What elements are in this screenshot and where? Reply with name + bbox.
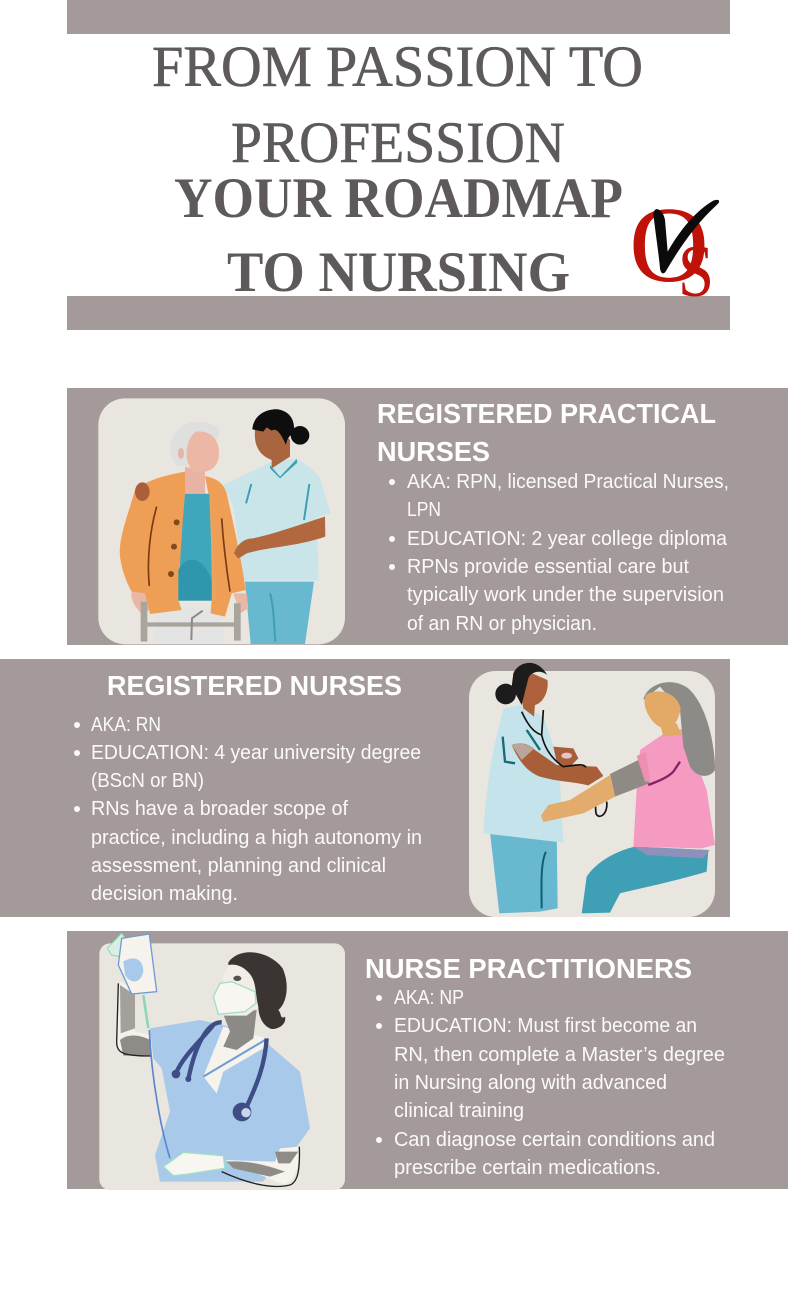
logo: O — [629, 186, 709, 305]
title: PROFESSION — [231, 110, 565, 175]
illustration: masked nurse holding IV bag — [99, 933, 345, 1190]
bullet list: AKA: NP — [394, 987, 464, 1009]
bullet list — [376, 987, 725, 1179]
bullet list: Can diagnose certain conditions and — [394, 1129, 715, 1151]
bullet list: (BScN or BN) — [91, 770, 204, 792]
bullet list: RNs have a broader scope of — [91, 798, 348, 820]
title: FROM PASSION TO — [152, 34, 643, 99]
title — [152, 34, 643, 175]
panel: nurse practitioners — [67, 931, 788, 1190]
panel: registered nurses — [0, 659, 730, 917]
heading: REGISTERED PRACTICAL — [377, 398, 716, 429]
bullet list: decision making. — [91, 883, 238, 905]
bullet list: prescribe certain medications. — [394, 1157, 661, 1179]
logo: S — [678, 231, 714, 313]
bullet list — [74, 714, 422, 905]
bullet list: clinical training — [394, 1100, 524, 1122]
bullet list: EDUCATION: Must first become an — [394, 1015, 697, 1037]
bullet list: RN, then complete a Master’s degree — [394, 1044, 725, 1066]
bullet list: AKA: RPN, licensed Practical Nurses, — [407, 471, 729, 493]
bullet list: AKA: RN — [91, 714, 161, 736]
subtitle: YOUR ROADMAP — [174, 167, 623, 230]
subtitle: TO NURSING — [227, 241, 570, 304]
heading — [377, 398, 716, 467]
subtitle — [174, 167, 623, 304]
bullet list: assessment, planning and clinical — [91, 855, 386, 877]
heading: NURSES — [377, 436, 490, 467]
bullet list: in Nursing along with advanced — [394, 1072, 667, 1094]
illustration: nurse helping elderly patient with walker — [98, 398, 345, 644]
bullet list: of an RN or physician. — [407, 613, 597, 635]
bullet list: EDUCATION: 2 year college diploma — [407, 528, 728, 550]
bottom title band — [67, 296, 730, 330]
top title band — [67, 0, 730, 34]
illustration: nurse taking patient's blood pressure — [469, 663, 715, 917]
bullet list: LPN — [407, 499, 441, 521]
bullet list: typically work under the supervision — [407, 584, 724, 606]
heading: NURSE PRACTITIONERS — [365, 953, 692, 984]
bullet list — [389, 471, 729, 635]
bullet list: EDUCATION: 4 year university degree — [91, 742, 421, 764]
heading: REGISTERED NURSES — [107, 670, 402, 701]
panel: registered practical nurses — [67, 388, 788, 645]
bullet list: practice, including a high autonomy in — [91, 827, 422, 849]
bullet list: RPNs provide essential care but — [407, 556, 689, 578]
